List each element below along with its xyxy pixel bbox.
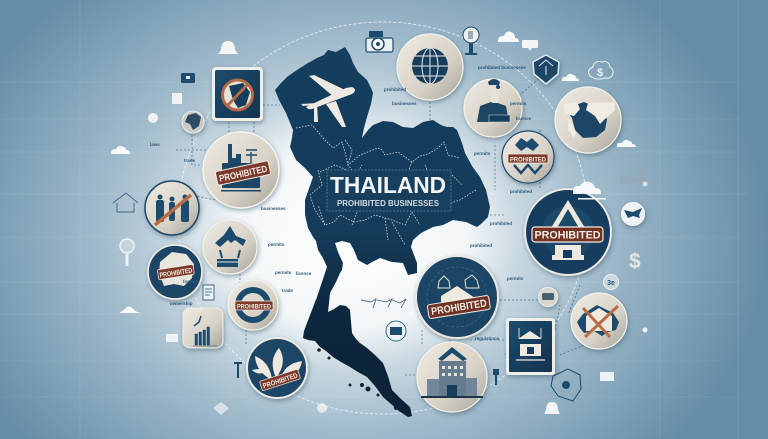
icon: round badge: 3e: [607, 280, 615, 287]
stamp: PROHIBITED: [262, 373, 299, 390]
circle: businessperson: [464, 79, 522, 137]
tiny captions: licence: [296, 271, 312, 276]
icon: no-map square: [212, 67, 263, 121]
tiny captions: [150, 65, 532, 341]
stamp: PROHIBITED: [430, 297, 488, 318]
map of Thailand: [275, 47, 490, 417]
tiny captions: prohibited businesses: [478, 65, 526, 70]
icon: round badge: [604, 274, 618, 290]
subtitle: PROHIBITED BUSINESSES: [337, 198, 439, 208]
circle: blue prohibited map: [148, 245, 202, 299]
circle: people banned: [145, 181, 199, 235]
icon: plane badge: [622, 202, 644, 226]
icon: document: [203, 285, 214, 300]
stamp: [532, 227, 603, 242]
icon: padlocks: [218, 41, 560, 414]
tiny captions: permits: [507, 276, 524, 281]
circle: world map: [555, 87, 621, 153]
circle: roofs prohibited: PROHIBITED: [510, 156, 546, 164]
icon: truck and buildings: [620, 170, 653, 186]
square: temple sign: [506, 318, 555, 375]
tiny captions: foreign: [183, 279, 199, 284]
icons: small clouds: [111, 74, 636, 313]
circle: government building: [417, 342, 487, 412]
icon: small pale shapes: [148, 93, 648, 415]
circle: roofs prohibited: [502, 131, 554, 183]
stamp: PROHIBITED: [159, 267, 193, 280]
circle: big house prohibited: [525, 189, 611, 275]
tiny captions: licence: [516, 116, 532, 121]
icon: dollar cloud: [589, 62, 613, 79]
islands: [317, 348, 398, 410]
tiny captions: businesses: [392, 101, 417, 106]
tiny captions: permits: [268, 242, 285, 247]
circle: factory prohibited: [203, 132, 279, 208]
small camera disc: [538, 288, 558, 306]
square: growth chart: [183, 308, 223, 348]
dashed orbit: [178, 22, 588, 414]
circle: leaves prohibited: [247, 338, 307, 398]
circle: tree icon: [203, 220, 257, 274]
icon: lamp badge: [463, 27, 479, 55]
tiny captions: laws: [150, 142, 160, 147]
tiny captions: prohibited: [384, 87, 406, 92]
icon: pins: [234, 362, 499, 385]
icon: small document badge: [386, 321, 406, 341]
province borders: [296, 125, 476, 245]
tiny captions: businesses: [261, 206, 286, 211]
tiny captions: permits: [275, 270, 292, 275]
tiny captions: trade: [184, 158, 196, 163]
circle: globe: [397, 34, 463, 100]
tiny captions: permits: [510, 101, 527, 106]
tiny captions: prohibited: [470, 243, 492, 248]
tiny captions: prohibited: [490, 221, 512, 226]
icon: shield: [533, 55, 559, 84]
stamp: [235, 301, 273, 310]
tiny captions: trade: [282, 288, 294, 293]
title box: [327, 170, 451, 211]
circle: big house prohibited: PROHIBITED: [534, 230, 601, 242]
circle: crown prohibited: [416, 256, 498, 338]
icon: cloud top: [498, 32, 519, 42]
airplane: [301, 75, 355, 127]
tiny captions: regulations: [475, 336, 500, 341]
icon: dollar cloud: $: [597, 67, 603, 79]
icon: house outline: [113, 193, 138, 212]
tiny captions: ownership: [170, 301, 193, 306]
icon: camera: [366, 31, 393, 52]
icon: briefcase: [181, 73, 195, 83]
small globe disc: [182, 111, 204, 133]
tiny captions: prohibited: [510, 189, 532, 194]
circle: ring prohibited: PROHIBITED: [237, 304, 271, 310]
circle: house crossed out: [571, 293, 627, 349]
connector lines: [176, 60, 596, 395]
icon: lens: [120, 239, 134, 266]
icon: hexagon coin: [551, 369, 581, 401]
icon: birds: [361, 299, 406, 308]
icon: cloud over circle: [573, 182, 606, 200]
icon: dollar sign: $: [629, 250, 641, 273]
tiny captions: permits: [474, 151, 491, 156]
stamp: [508, 154, 548, 163]
circle: ring prohibited: [228, 280, 278, 330]
title: THAILAND: [330, 172, 446, 198]
stamp: PROHIBITED: [218, 164, 268, 185]
icon: speech tag: [522, 40, 538, 51]
